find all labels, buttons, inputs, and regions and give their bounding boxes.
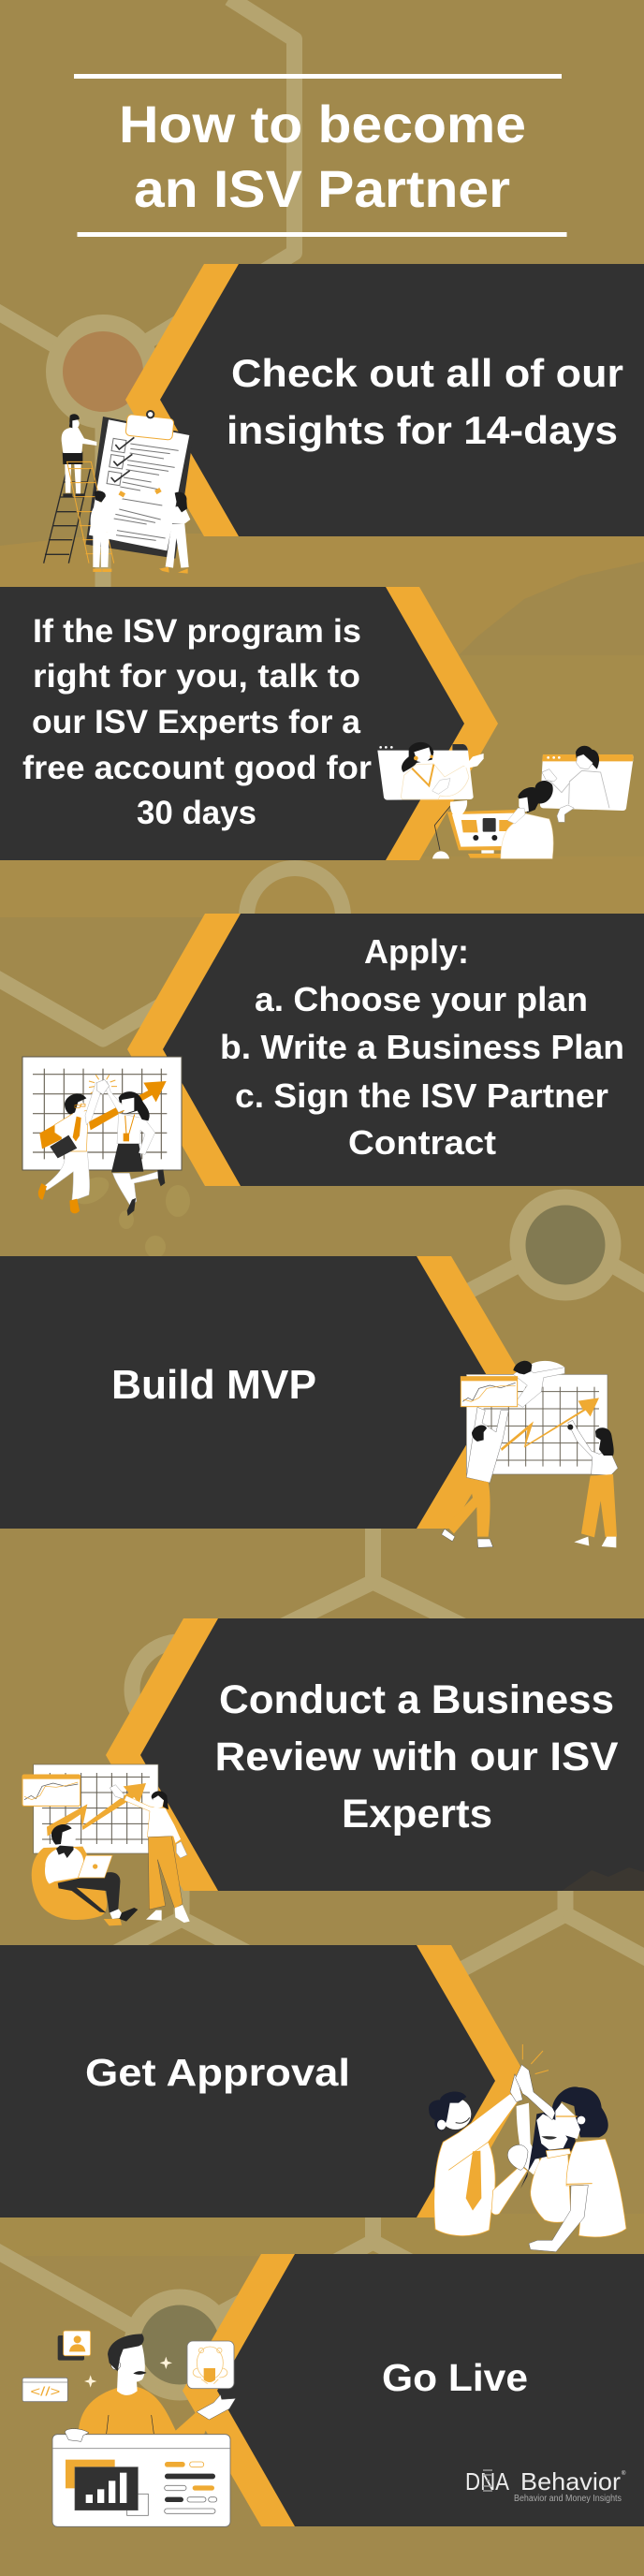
illustration: video call [377, 742, 634, 858]
step 3 text: a. Choose your plan [255, 980, 588, 1018]
step 5 text [215, 1677, 619, 1837]
step 1 text: Check out all of our [231, 351, 623, 395]
step 2 text: right for you, talk to [33, 658, 360, 695]
step 2 text: our ISV Experts for a [32, 704, 361, 740]
step 4 text: Build MVP [111, 1362, 316, 1408]
panel: step 1 [44, 264, 644, 574]
title block [74, 74, 567, 237]
step 3 text: Apply: [364, 932, 469, 971]
step 3 text: Contract [348, 1123, 496, 1162]
step 5 text: Review with our ISV [215, 1734, 619, 1779]
panel: step 7 [22, 2254, 644, 2526]
step 6 text: Get Approval [85, 2051, 350, 2094]
illustration: team with checklist [44, 411, 194, 574]
panel: step 4 [0, 1256, 618, 1547]
illustration: business review [22, 1764, 190, 1925]
step 1 text [227, 351, 623, 452]
title line 2: an ISV Partner [134, 159, 510, 218]
logo: DNA Behavior: Behavior [520, 2467, 621, 2496]
step 5 text: Conduct a Business [219, 1677, 614, 1722]
illustration: high five at chart [22, 1057, 182, 1216]
step 3 text [220, 932, 624, 1162]
step 2 text: free account good for [22, 750, 372, 786]
panel: step 3 [22, 914, 644, 1216]
step 7 text: Go Live [382, 2356, 528, 2399]
illustration: team high five [429, 2044, 626, 2252]
step 5 text: Experts [342, 1792, 492, 1837]
logo: DNA Behavior [465, 2467, 626, 2504]
step 2 text [22, 613, 372, 831]
step 1 text: insights for 14-days [227, 408, 618, 452]
panel: step 6 [0, 1945, 626, 2252]
step 2 text: If the ISV program is [33, 613, 361, 650]
illustration: team building chart [442, 1361, 618, 1547]
step 3 text: c. Sign the ISV Partner [235, 1076, 608, 1115]
logo: DNA Behavior: DNA [465, 2467, 510, 2496]
illustration: dashboard presenter [22, 2331, 236, 2526]
step 3 text: b. Write a Business Plan [220, 1028, 624, 1066]
illustration: dashboard presenter: <//> [30, 2384, 60, 2399]
panel: step 5 [22, 1618, 644, 1925]
step 2 text: 30 days [137, 795, 256, 831]
title line 1: How to become [119, 95, 526, 154]
panel: step 2 [0, 587, 634, 860]
logo: DNA Behavior: ® [622, 2470, 626, 2477]
logo: DNA Behavior: Behavior and Money Insights [514, 2494, 622, 2504]
